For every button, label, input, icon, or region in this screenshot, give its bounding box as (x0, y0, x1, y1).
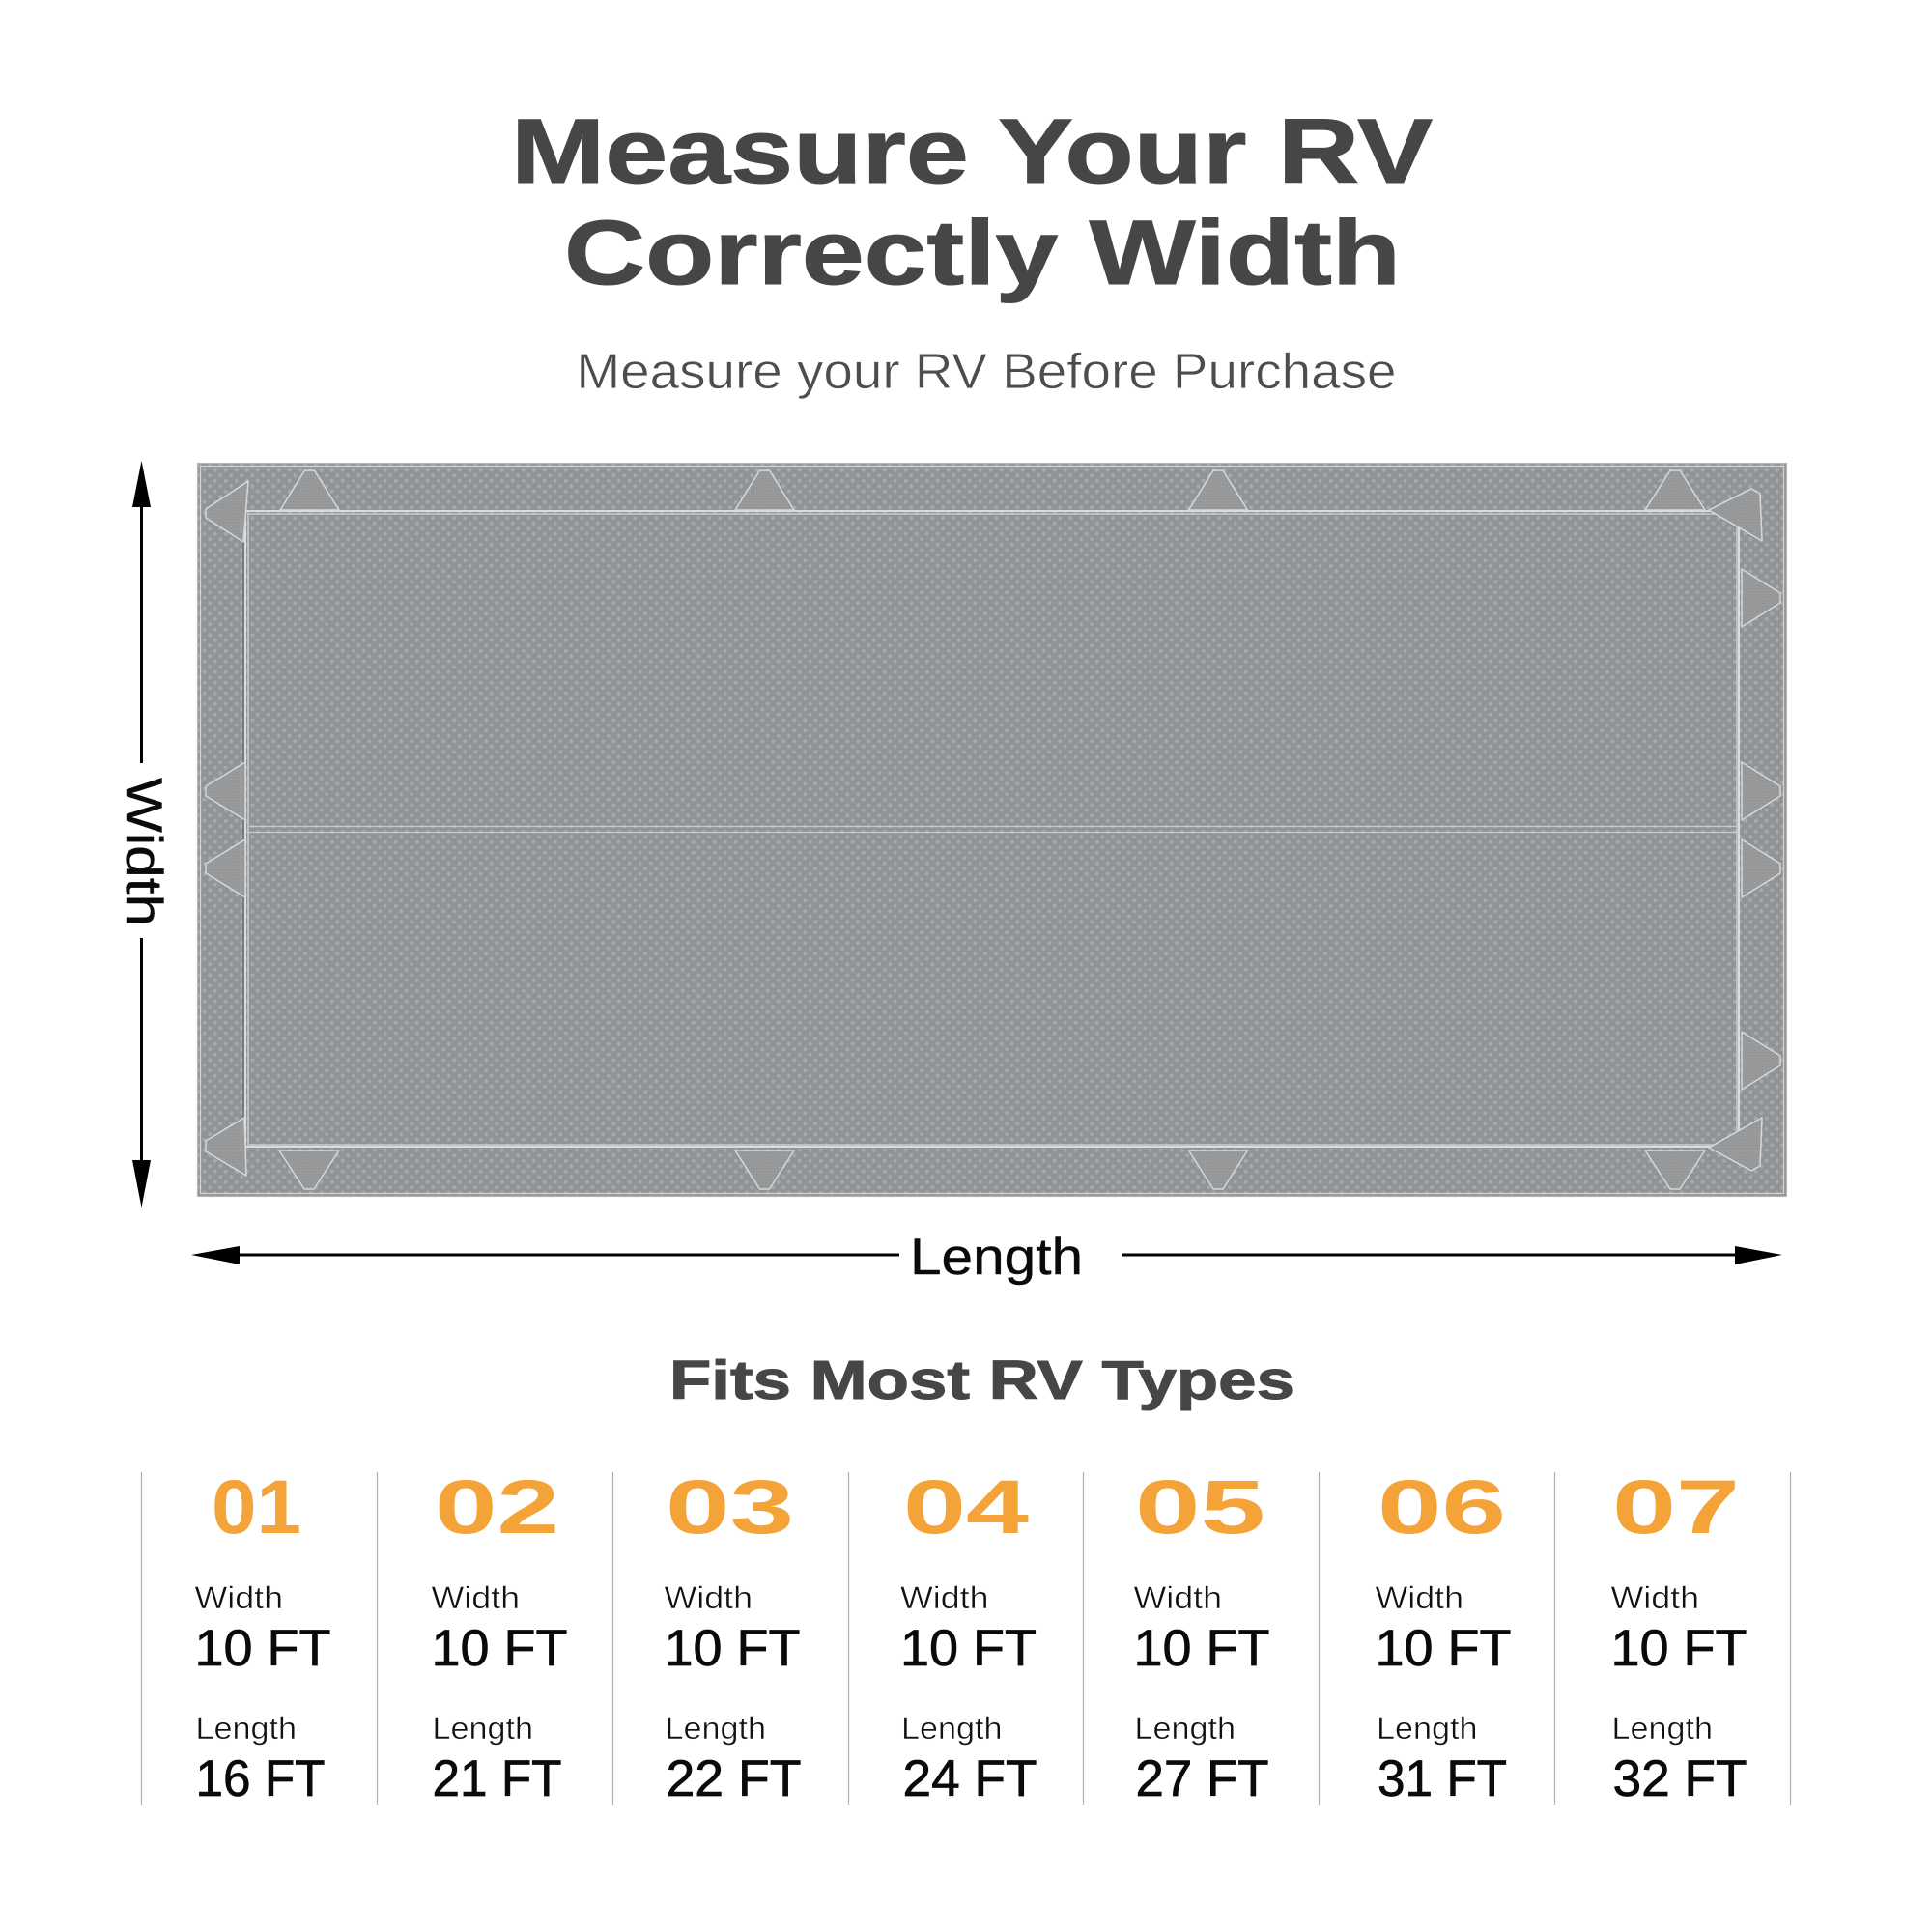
column 01: Width (195, 1580, 283, 1615)
column 03: Width (665, 1580, 753, 1615)
column 07 (1611, 1463, 1747, 1807)
column 05: Length (1134, 1711, 1236, 1746)
column 03: Length (665, 1711, 766, 1746)
column 07: 07 (1612, 1463, 1740, 1549)
column 04: 04 (903, 1463, 1029, 1549)
column 02: Length (433, 1711, 533, 1746)
length dimension arrow: Length (910, 1229, 1083, 1286)
bottom grommet tabs (279, 1151, 1705, 1189)
column 02: Width (431, 1580, 520, 1615)
size table (141, 1463, 1791, 1807)
heading: fits most RV types: Fits Most RV Types (669, 1350, 1294, 1411)
column 01: 01 (212, 1463, 301, 1549)
column 07: 32 FT (1613, 1750, 1747, 1807)
column 04: Length (901, 1711, 1003, 1746)
column 06: 10 FT (1376, 1620, 1511, 1677)
column 05 (1134, 1463, 1269, 1807)
column 06: Width (1376, 1580, 1463, 1615)
column 07: Width (1611, 1580, 1699, 1615)
column 03 (665, 1463, 802, 1807)
panel: RV mat diagram (197, 463, 1787, 1197)
column 07: 10 FT (1611, 1620, 1747, 1677)
mat outer stitching (197, 464, 1787, 1196)
column 02: 10 FT (431, 1620, 568, 1677)
column 05: Width (1134, 1580, 1222, 1615)
title: Correctly Width (564, 202, 1401, 304)
column 05: 05 (1135, 1463, 1265, 1549)
title (511, 100, 1433, 304)
title: Measure Your RV (511, 100, 1433, 203)
length dimension arrow (191, 1229, 1782, 1286)
column 01: 16 FT (195, 1750, 325, 1807)
column 04 (900, 1463, 1037, 1807)
column 04: 24 FT (902, 1750, 1037, 1807)
column 03: 10 FT (665, 1620, 800, 1677)
column 02: 21 FT (433, 1750, 562, 1807)
mat inner seam border (243, 511, 1739, 1147)
width dimension arrow: Width (115, 778, 172, 926)
column 06: Length (1377, 1711, 1478, 1746)
column 04: Width (900, 1580, 989, 1615)
column 01 (195, 1463, 330, 1807)
column 04: 10 FT (900, 1620, 1037, 1677)
right grommet tabs (1742, 569, 1780, 1090)
subtitle: Measure your RV Before Purchase (576, 344, 1397, 400)
column 02: 02 (435, 1463, 559, 1549)
column 06: 06 (1378, 1463, 1506, 1549)
column 05: 27 FT (1136, 1750, 1269, 1807)
column 01: Length (195, 1711, 297, 1746)
column 03: 22 FT (667, 1750, 802, 1807)
column 02 (431, 1463, 568, 1807)
column 03: 03 (666, 1463, 794, 1549)
mat body (197, 463, 1787, 1197)
mat center seam (247, 827, 1737, 833)
corner grommet tabs (1709, 489, 1762, 1171)
top grommet tabs (280, 470, 1705, 510)
column 07: Length (1611, 1711, 1713, 1746)
column 06 (1376, 1463, 1511, 1807)
column 05: 10 FT (1134, 1620, 1269, 1677)
column dividers (141, 1472, 1791, 1805)
left grommet tabs (206, 481, 248, 1176)
column 06: 31 FT (1378, 1750, 1507, 1807)
column 01: 10 FT (195, 1620, 330, 1677)
width dimension arrow (115, 461, 172, 1208)
